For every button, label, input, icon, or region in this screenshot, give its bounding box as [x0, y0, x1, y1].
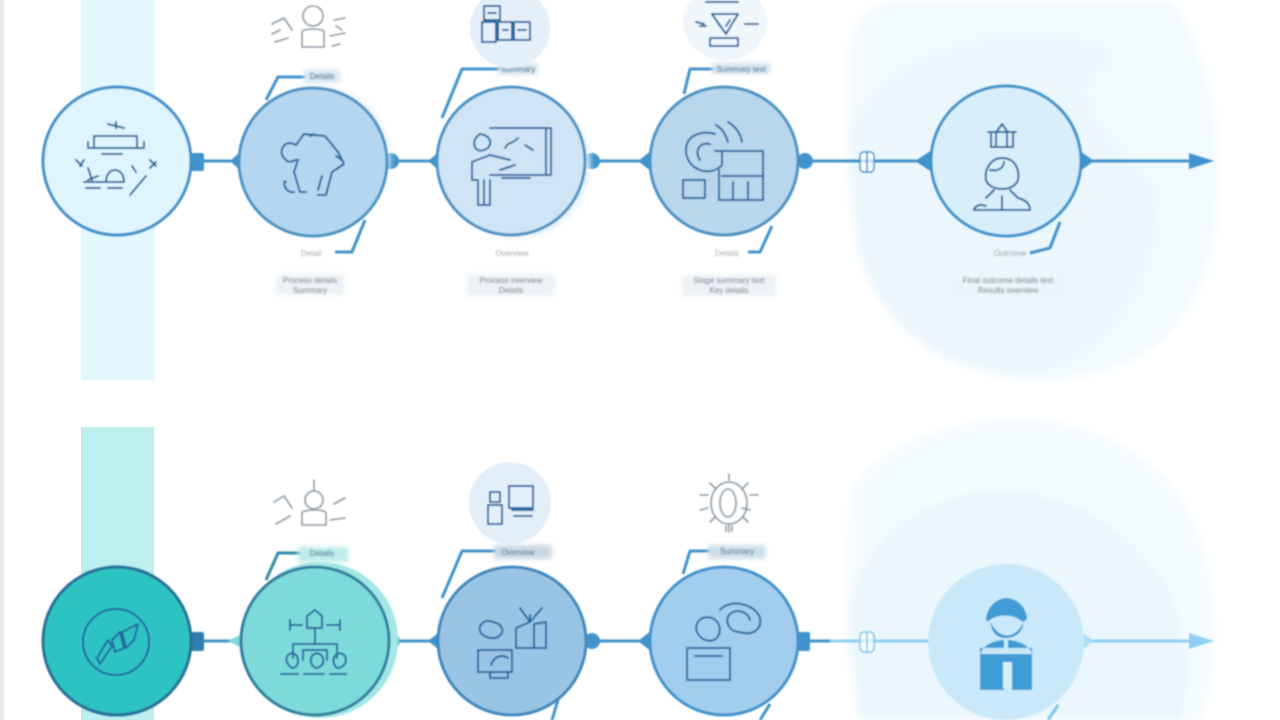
step 4 bottom: idea node — [650, 474, 798, 720]
callout label top: Details — [310, 72, 334, 81]
step 3 bottom: chart node — [438, 462, 586, 720]
right background shape: top row — [847, 0, 1219, 380]
icon: lightbulb — [700, 474, 758, 532]
callout label top — [498, 63, 538, 75]
step 5 top: person node — [931, 86, 1081, 295]
callout leader bottom — [335, 220, 365, 252]
accent strip: bottom row — [81, 427, 154, 720]
step 5 bottom: solid person node — [928, 564, 1084, 720]
description: Process details — [283, 276, 337, 285]
callout leader top — [684, 69, 716, 94]
callout leader bottom — [1030, 222, 1060, 253]
icon: org chart — [281, 610, 346, 674]
step label: Details — [715, 249, 739, 258]
step 1 bottom: teal node — [43, 567, 191, 715]
description: Details — [499, 286, 523, 295]
icon: connected loop — [282, 134, 344, 195]
icon: leaf in circle — [83, 609, 149, 675]
accent strip: top row — [81, 0, 155, 380]
callout label top — [304, 70, 340, 83]
icon: clock, brain and laptop — [687, 604, 760, 680]
icon: teacher at board — [472, 128, 551, 205]
callout leader top — [442, 69, 502, 118]
callout label top: Overview — [501, 548, 535, 557]
bottom timeline connector and arrow — [191, 630, 1214, 652]
top timeline connector and arrow — [191, 150, 1214, 172]
icon: person silhouette — [980, 598, 1032, 690]
left page edge — [0, 0, 4, 720]
step label: Outcome — [994, 249, 1027, 258]
callout leader bottom — [760, 704, 770, 720]
icon: monitor with data — [683, 0, 767, 60]
callout leader bottom — [1048, 705, 1058, 720]
callout leader top — [683, 551, 712, 574]
callout leader bottom — [748, 226, 772, 252]
description: Stage summary text — [693, 276, 765, 285]
callout label top — [494, 545, 552, 559]
step 2 bottom: hierarchy node — [241, 480, 398, 718]
right background shape: bottom row — [848, 420, 1214, 720]
description: Summary — [293, 286, 327, 295]
callout label top — [712, 63, 770, 74]
callout label top — [298, 547, 348, 562]
callout label top: Summary — [720, 547, 754, 556]
callout label top: Summary text — [716, 65, 766, 74]
callout leader top — [442, 551, 505, 598]
description: Final outcome details text — [963, 276, 1054, 285]
callout leader bottom — [552, 700, 558, 720]
description — [276, 274, 344, 295]
description: Process overview — [480, 276, 543, 285]
icon: person with ideas — [272, 6, 345, 47]
step 3 top: teaching node — [437, 0, 590, 296]
callout leader top — [266, 553, 304, 580]
step 1 top: intro node — [43, 87, 191, 235]
icon: person with gift — [974, 124, 1030, 210]
step 4 top: analysis node — [650, 0, 798, 297]
icon: workspace — [76, 122, 156, 195]
callout label top — [708, 545, 766, 559]
icon: person with ideas — [274, 480, 345, 525]
step label: Detail — [301, 249, 321, 258]
description — [955, 275, 1065, 295]
icon: dish and dashboard — [683, 122, 763, 200]
icon: badge with group — [470, 0, 550, 68]
callout label top: Summary — [501, 65, 535, 74]
callout leader top — [266, 77, 306, 100]
icon: badge with board — [469, 462, 551, 544]
step 2 top: process node — [239, 6, 390, 295]
callout label top: Details — [310, 549, 334, 558]
description — [682, 275, 776, 297]
description: Results overview — [978, 286, 1038, 295]
icon: person, monitor and chart — [478, 608, 546, 678]
step label: Overview — [495, 249, 529, 258]
description: Key details — [709, 286, 749, 295]
description — [467, 274, 555, 296]
